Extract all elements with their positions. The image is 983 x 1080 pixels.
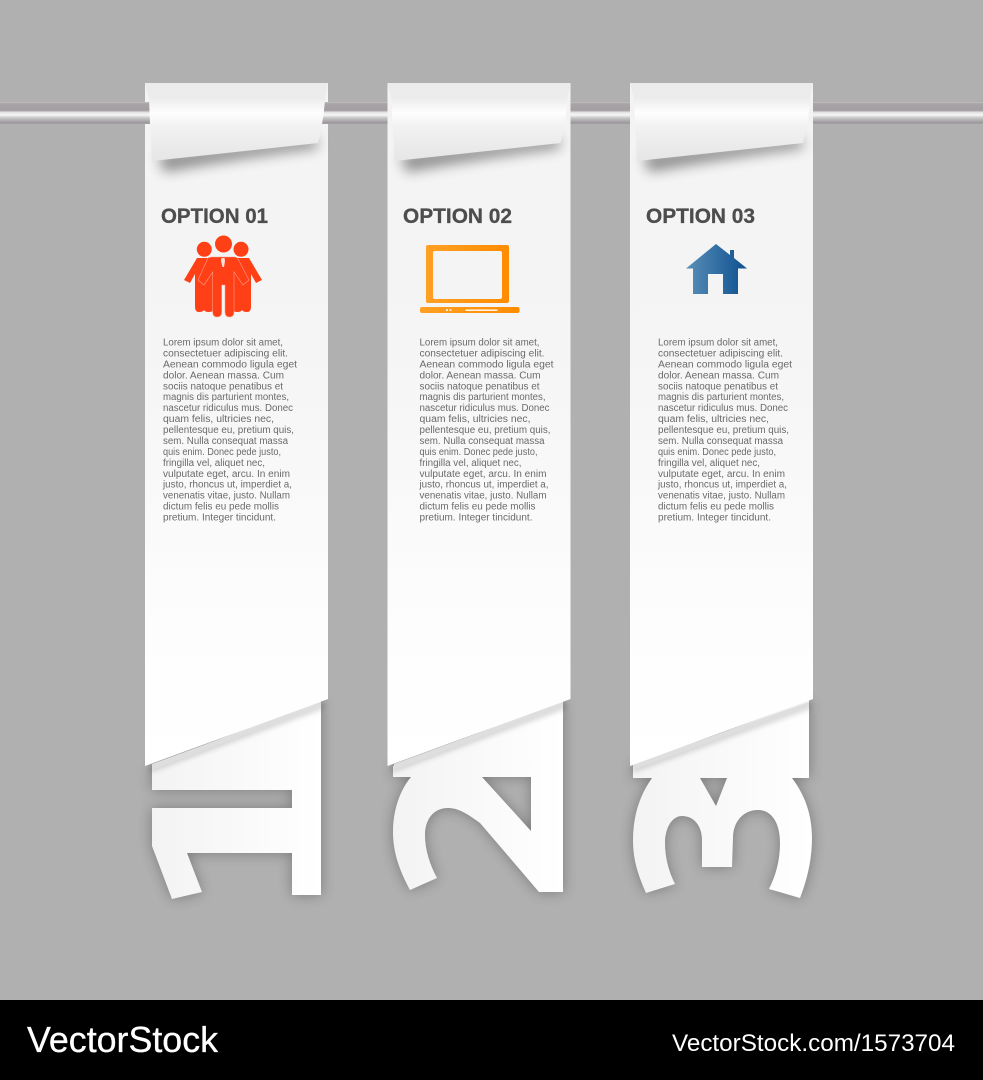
panel: option 01 <box>145 83 328 899</box>
body text: consectetuer adipiscing elit. <box>420 348 544 359</box>
body text: consectetuer adipiscing elit. <box>163 348 288 359</box>
body text: fringilla vel, aliquet nec, <box>420 458 522 469</box>
body text: justo, rhoncus ut, imperdiet a, <box>418 480 548 491</box>
icon: laptop <box>420 245 520 313</box>
body text: fringilla vel, aliquet nec, <box>163 458 265 469</box>
ribbon body <box>145 83 328 772</box>
body text: vulputate eget, arcu. In enim <box>658 469 785 480</box>
footer bar <box>0 1000 983 1080</box>
body text: quis enim. Donec pede justo, <box>420 447 538 458</box>
body text: pellentesque eu, pretium quis, <box>420 425 550 436</box>
body text: quam felis, ultricies nec, <box>420 414 530 425</box>
curled flap <box>388 83 570 172</box>
body text <box>657 338 792 524</box>
body text: quam felis, ultricies nec, <box>163 414 274 425</box>
body text: vulputate eget, arcu. In enim <box>420 469 546 480</box>
number 2 tab <box>393 700 563 892</box>
body text: dictum felis eu pede mollis <box>163 502 279 513</box>
body text: Lorem ipsum dolor sit amet, <box>163 338 283 348</box>
curled flap <box>630 83 813 172</box>
body text: nascetur ridiculus mus. Donec <box>420 403 550 414</box>
body text: sem. Nulla consequat massa <box>163 436 289 447</box>
footer logo: VectorStock <box>27 1019 219 1060</box>
body text: consectetuer adipiscing elit. <box>658 348 783 359</box>
body text <box>418 338 554 524</box>
curled flap <box>145 83 328 172</box>
body text: fringilla vel, aliquet nec, <box>658 458 760 469</box>
body text: nascetur ridiculus mus. Donec <box>658 403 788 414</box>
body text: magnis dis parturient montes, <box>658 392 784 403</box>
body text: Aenean commodo ligula eget <box>420 359 554 370</box>
body text <box>162 338 297 524</box>
body text: quis enim. Donec pede justo, <box>163 447 281 458</box>
body text: sem. Nulla consequat massa <box>658 436 784 447</box>
body text: dolor. Aenean massa. Cum <box>420 370 540 381</box>
icon: house <box>686 244 747 294</box>
body text: magnis dis parturient montes, <box>420 392 546 403</box>
metal rod <box>0 102 983 124</box>
ribbon body <box>388 83 570 772</box>
body text: justo, rhoncus ut, imperdiet a, <box>657 480 787 491</box>
heading: OPTION 03 <box>646 204 755 228</box>
body text: sociis natoque penatibus et <box>163 381 283 392</box>
body text: venenatis vitae, justo. Nullam <box>163 491 290 502</box>
ribbon body <box>630 83 813 772</box>
body text: pretium. Integer tincidunt. <box>658 512 771 524</box>
number 1 tab <box>152 700 321 899</box>
body text: Aenean commodo ligula eget <box>658 359 792 370</box>
body text: pellentesque eu, pretium quis, <box>163 425 294 436</box>
body text: quis enim. Donec pede justo, <box>658 447 776 458</box>
body text: justo, rhoncus ut, imperdiet a, <box>162 480 292 491</box>
body text: Aenean commodo ligula eget <box>163 359 297 370</box>
number 3 tab <box>633 700 812 898</box>
panel: option 03 <box>630 83 813 898</box>
heading: OPTION 01 <box>161 204 268 228</box>
body text: dictum felis eu pede mollis <box>658 502 774 513</box>
body text: pellentesque eu, pretium quis, <box>658 425 789 436</box>
body text: pretium. Integer tincidunt. <box>163 512 276 524</box>
body text: magnis dis parturient montes, <box>163 392 289 403</box>
body text: venenatis vitae, justo. Nullam <box>420 491 546 502</box>
body text: sociis natoque penatibus et <box>420 381 540 392</box>
body text: nascetur ridiculus mus. Donec <box>163 403 293 414</box>
body text: sociis natoque penatibus et <box>658 381 778 392</box>
footer url: VectorStock.com/1573704 <box>672 1030 955 1057</box>
body text: quam felis, ultricies nec, <box>658 414 769 425</box>
body text: Lorem ipsum dolor sit amet, <box>658 338 778 348</box>
body text: Lorem ipsum dolor sit amet, <box>420 338 540 348</box>
body text: dolor. Aenean massa. Cum <box>163 370 284 381</box>
panel: option 02 <box>388 83 570 892</box>
body text: vulputate eget, arcu. In enim <box>163 469 290 480</box>
body text: sem. Nulla consequat massa <box>420 436 545 447</box>
body text: venenatis vitae, justo. Nullam <box>658 491 785 502</box>
body text: dolor. Aenean massa. Cum <box>658 370 779 381</box>
body text: dictum felis eu pede mollis <box>420 502 536 513</box>
icon: people <box>184 236 262 317</box>
body text: pretium. Integer tincidunt. <box>420 512 532 524</box>
heading: OPTION 02 <box>403 204 512 228</box>
